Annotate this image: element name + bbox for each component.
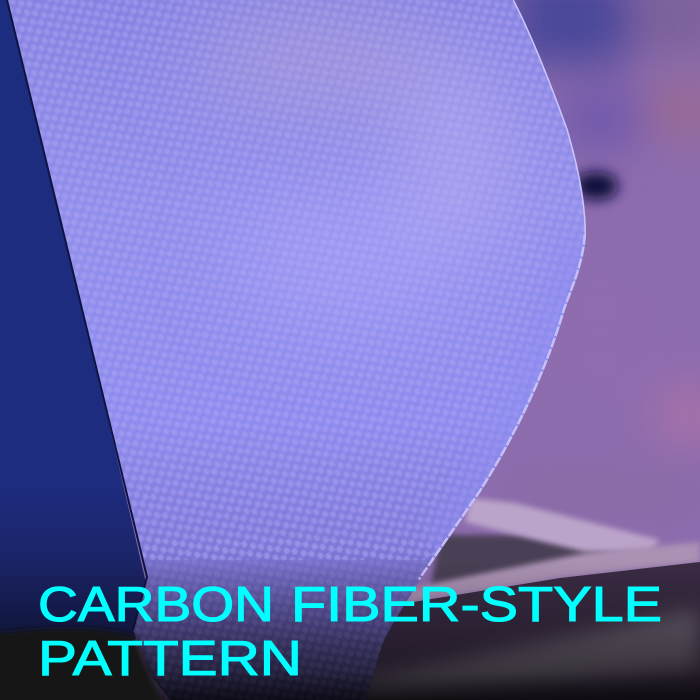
panel seam (7, 0, 147, 630)
lower-left dark base (0, 628, 170, 700)
title: FIBER-STYLE (291, 578, 662, 632)
title: CARBON (38, 578, 274, 632)
smooth rim near the stitched edge (440, 235, 586, 550)
title: PATTERN (38, 632, 302, 686)
dark blotch behind seat edge (574, 172, 618, 200)
soft highlights (190, 10, 520, 330)
navy side panel (0, 0, 150, 640)
caption backdrop shade (0, 560, 700, 700)
title (38, 578, 662, 686)
lower room shadows and beams (360, 498, 700, 700)
